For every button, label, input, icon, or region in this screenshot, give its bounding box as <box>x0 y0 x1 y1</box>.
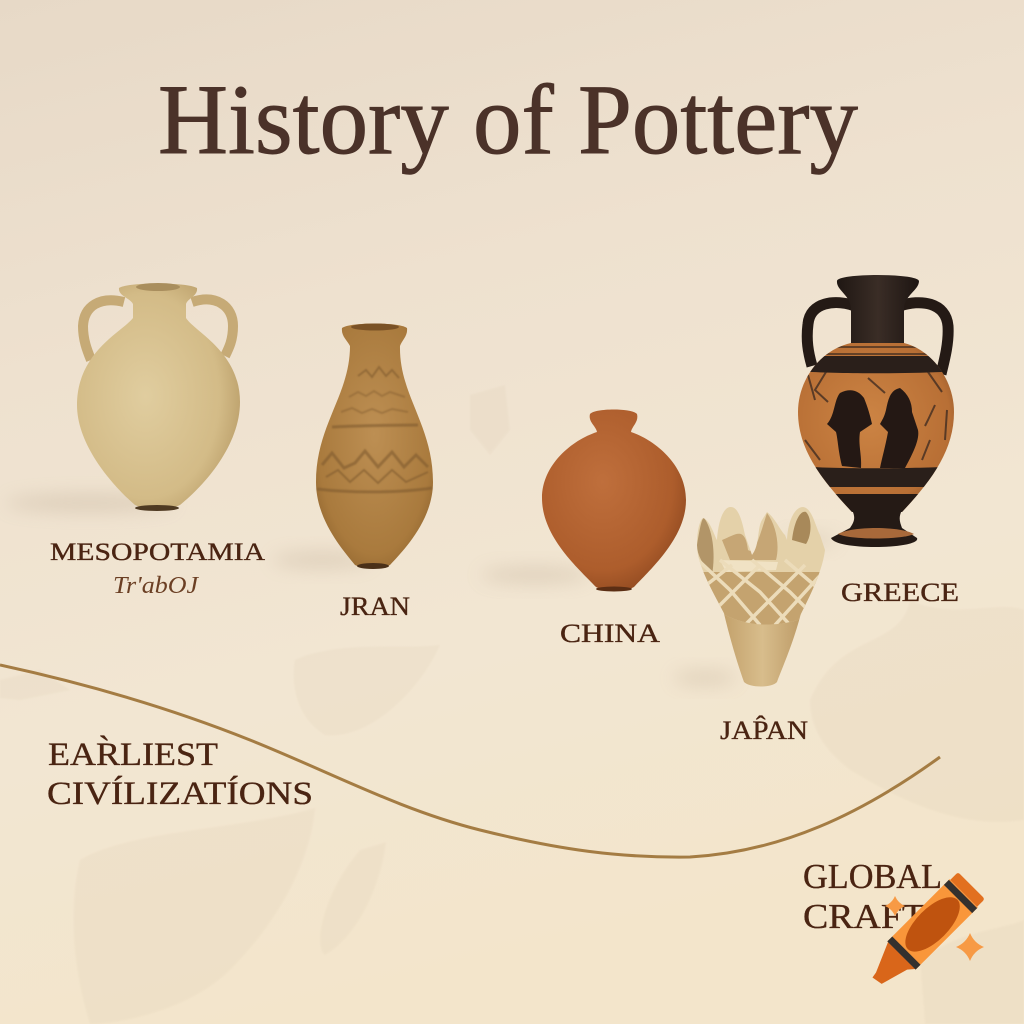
painted foliage <box>805 372 947 460</box>
cone base <box>722 605 803 686</box>
icon: small sparkle <box>885 896 905 916</box>
vase: Mesopotamia <box>5 283 240 512</box>
crayon body <box>887 879 978 970</box>
handles <box>807 303 948 374</box>
crayon tip <box>863 936 921 994</box>
title: History of Pottery <box>158 64 858 175</box>
timeline curve <box>0 665 940 857</box>
label: China: CHINA <box>560 619 660 648</box>
body <box>77 284 240 509</box>
handles <box>83 299 233 360</box>
crayon cap <box>950 872 985 907</box>
foot <box>831 510 917 547</box>
neck and lip <box>837 275 919 345</box>
label: Greece: GREECE <box>841 578 959 607</box>
silhouette figures <box>827 390 872 468</box>
label: Japan: JAP̂AN <box>720 716 808 745</box>
label: Earliest Civilizations <box>47 735 313 812</box>
label: Mesopotamia: MESOPOTAMIA <box>50 539 265 566</box>
label: Iran: JRAN <box>340 592 410 621</box>
label: Global Craft: CRAFT <box>803 897 925 936</box>
body <box>795 343 960 513</box>
body <box>542 410 686 591</box>
label: Earliest Civilizations: EAR̀LIEST <box>48 735 218 773</box>
vase: Iran <box>272 324 433 569</box>
rim crown <box>697 507 825 624</box>
body <box>316 324 433 569</box>
inner shadow <box>722 513 778 560</box>
label: Earliest Civilizations: CIVÍLIZATÍONS <box>47 775 313 812</box>
label: garbled sub-caption: Tr'abOJ <box>113 573 199 599</box>
icon: large sparkle <box>956 933 984 961</box>
vase: China <box>480 410 686 592</box>
vase: Japan <box>684 507 825 686</box>
background: faint map shapes <box>0 385 1024 1024</box>
label: Global Craft: GLOBAL <box>803 857 942 896</box>
vase: Greece <box>798 275 954 547</box>
icon: crayon <box>862 871 986 995</box>
crayon oval label <box>897 888 969 960</box>
label: Global Craft <box>803 857 942 936</box>
incised decoration <box>317 367 432 492</box>
woven pattern <box>704 572 820 625</box>
